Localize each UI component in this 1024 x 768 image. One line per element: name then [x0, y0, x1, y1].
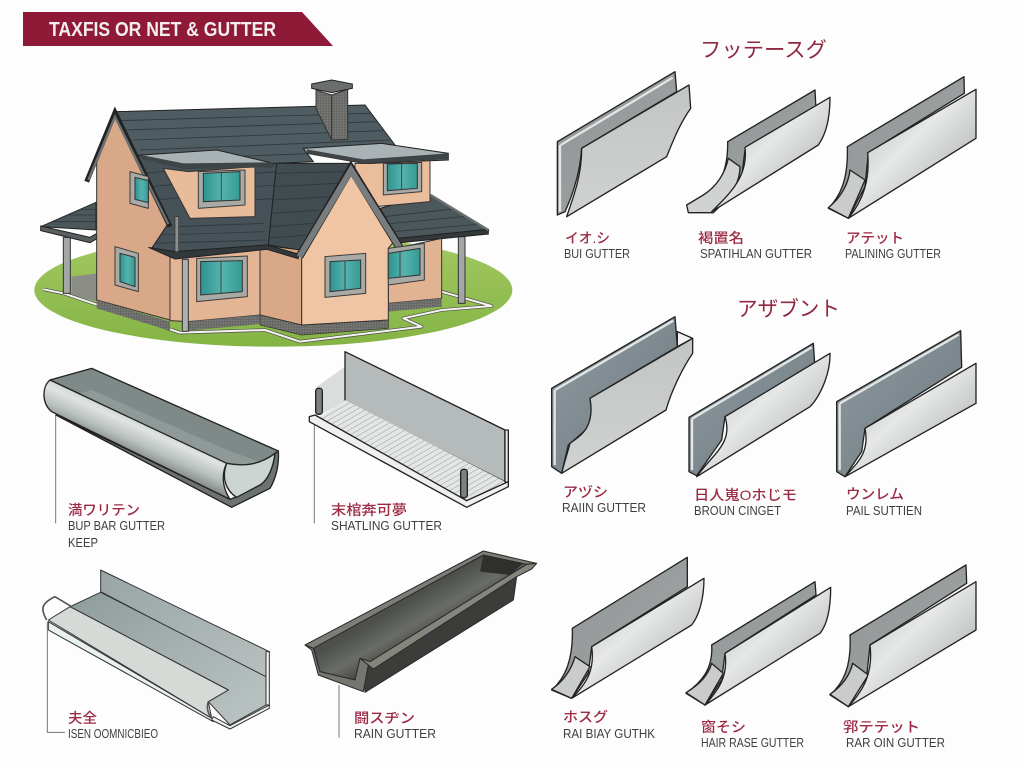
- second section heading: アザブント: [737, 298, 840, 321]
- house illustration: [34, 80, 512, 347]
- gutter: RAIN dark: [305, 551, 537, 738]
- top row labels: アテット: [846, 230, 904, 246]
- labels: half-round and box gutters: [68, 502, 442, 550]
- labels: lower-left gutters: ISEN OOMNICBIEO: [68, 727, 158, 741]
- gutter: BUP BAR: [44, 368, 278, 523]
- left rake highlight: [88, 117, 168, 224]
- top row gutters: [557, 72, 976, 218]
- top row labels: [564, 230, 941, 261]
- gutter: RAIIN: [552, 317, 693, 473]
- right porch: [380, 195, 488, 303]
- ground lawn: [34, 233, 512, 347]
- right dormer: [303, 143, 448, 207]
- middle row labels: BROUN CINGET: [694, 504, 781, 518]
- middle row labels: PAIL SUTTIEN: [846, 504, 922, 518]
- gutter: PALINING: [828, 77, 976, 218]
- gutter: RAI BIAY: [552, 557, 704, 698]
- eave fascia: [148, 245, 298, 259]
- top row labels: PALINING GUTTER: [845, 247, 941, 261]
- gutter: BUI: [557, 72, 691, 217]
- labels: half-round and box gutters: 満ワリテン: [68, 502, 140, 518]
- back roof: [115, 105, 395, 168]
- front gable roof: [268, 163, 350, 250]
- left rake: [87, 113, 170, 227]
- middle row labels: アヅシ: [563, 484, 608, 500]
- top row labels: BUI GUTTER: [564, 247, 630, 261]
- top row labels: 褐置名: [698, 230, 744, 246]
- bottom row labels: 窗そシ: [701, 719, 746, 735]
- bottom row labels: [563, 709, 945, 750]
- gutter: SPATIHLAN: [687, 90, 830, 213]
- labels: half-round and box gutters: 末棺奔可夢: [331, 502, 407, 518]
- middle row gutters: [552, 317, 976, 477]
- bottom row gutters: [552, 557, 976, 707]
- bottom row labels: 郛テテット: [843, 719, 920, 735]
- lower front-left roof: [135, 155, 277, 252]
- gutter: SHATLING: [309, 352, 508, 523]
- windows lower: [115, 172, 424, 302]
- gutter: PAIL: [837, 331, 976, 477]
- downpipe: [175, 217, 188, 331]
- lower-left gutters: [43, 551, 537, 738]
- gutter: HAIR: [686, 582, 831, 705]
- bottom row labels: RAI BIAY GUTHK: [563, 727, 656, 741]
- walls: [97, 113, 442, 335]
- pavement path: [43, 273, 492, 342]
- labels: half-round and box gutters: KEEP: [68, 536, 98, 550]
- labels: half-round and box gutters: SHATLING GUTTER: [331, 519, 442, 533]
- top section heading: フッテースグ: [700, 39, 827, 62]
- labels: lower-left gutters: 夫全: [68, 710, 97, 726]
- middle row labels: 日人嵬Oホじモ: [694, 487, 797, 503]
- front gable wall: [302, 172, 395, 325]
- middle row labels: RAIIN GUTTER: [562, 501, 646, 515]
- bottom row labels: HAIR RASE GUTTER: [701, 736, 804, 750]
- labels: lower-left gutters: RAIN GUTTER: [354, 727, 436, 741]
- bottom row labels: RAR OIN GUTTER: [846, 736, 945, 750]
- gutter: RAR OIN: [830, 565, 976, 707]
- half-round and box gutters: [44, 352, 508, 523]
- labels: half-round and box gutters: BUP BAR GUTTER: [68, 519, 165, 533]
- chimney: [312, 80, 352, 140]
- top row labels: イオ.シ: [565, 230, 610, 246]
- left porch: [41, 202, 102, 293]
- bottom row labels: ホスグ: [563, 709, 608, 725]
- labels: lower-left gutters: 闘スヂン: [354, 710, 415, 726]
- top row labels: SPATIHLAN GUTTER: [700, 247, 812, 261]
- middle row labels: ウンレム: [846, 486, 904, 502]
- labels: lower-left gutters: [68, 710, 436, 741]
- middle row labels: [562, 484, 922, 518]
- gutter: BROUN: [689, 343, 830, 477]
- gutter: ISEN: [43, 570, 269, 732]
- gable rake: [299, 168, 400, 257]
- left dormer: [142, 150, 273, 218]
- title banner: [23, 12, 333, 46]
- title banner: TAXFIS OR NET & GUTTER: [49, 19, 276, 41]
